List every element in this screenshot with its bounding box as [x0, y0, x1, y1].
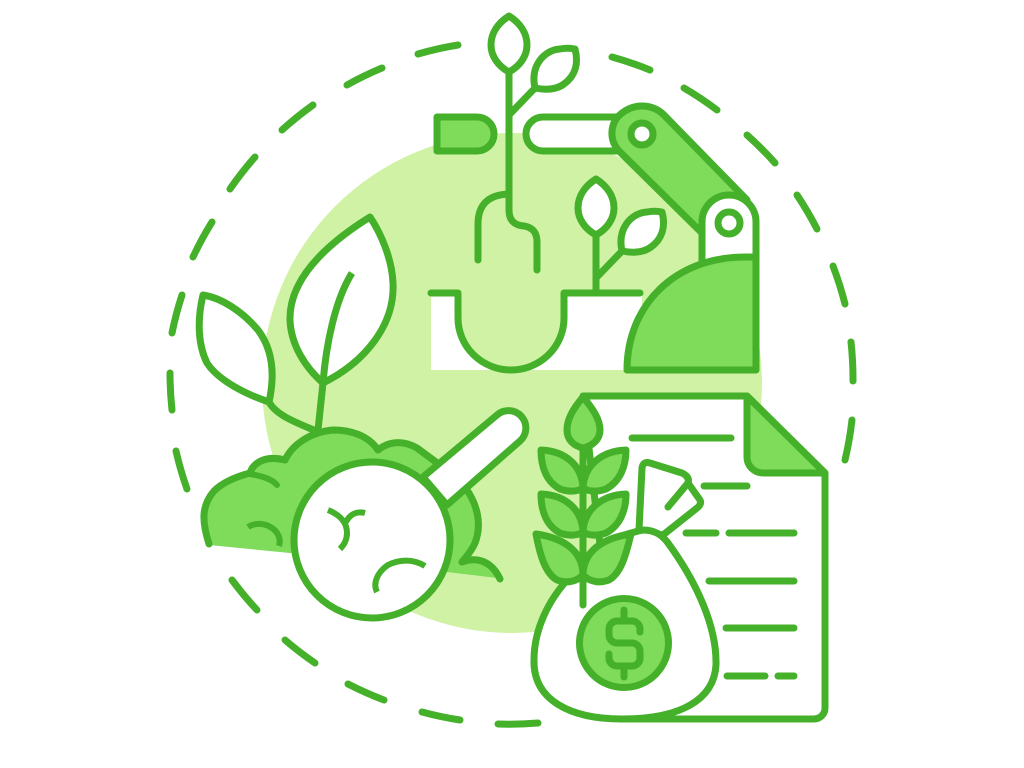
gripper left finger	[437, 117, 494, 151]
document	[583, 396, 825, 719]
upper arm	[612, 106, 747, 233]
magnifying glass	[294, 411, 526, 618]
large plant leaves	[199, 217, 393, 431]
upper joint	[631, 123, 653, 145]
magnified soil mound	[375, 561, 425, 592]
magnified sprout	[328, 510, 365, 549]
soil bush	[204, 430, 500, 579]
small seedling in pot	[578, 179, 664, 292]
elbow housing	[702, 195, 756, 265]
background circle	[262, 133, 762, 633]
money bag	[534, 463, 716, 719]
bag tie flaps	[639, 463, 701, 535]
gripper right finger	[526, 117, 622, 151]
document text lines	[632, 438, 794, 676]
tall seedling with roots	[478, 16, 577, 270]
magnifier handle	[423, 411, 526, 505]
folded corner	[747, 396, 825, 473]
bag body	[534, 530, 716, 719]
elbow joint	[718, 212, 740, 234]
planter pot	[431, 293, 642, 370]
dashed orbit ring	[170, 45, 853, 724]
robot base	[627, 257, 756, 370]
magnifier lens	[294, 462, 450, 618]
wheat stalk	[536, 397, 631, 605]
dollar coin	[580, 598, 668, 688]
robot arm	[437, 106, 756, 370]
